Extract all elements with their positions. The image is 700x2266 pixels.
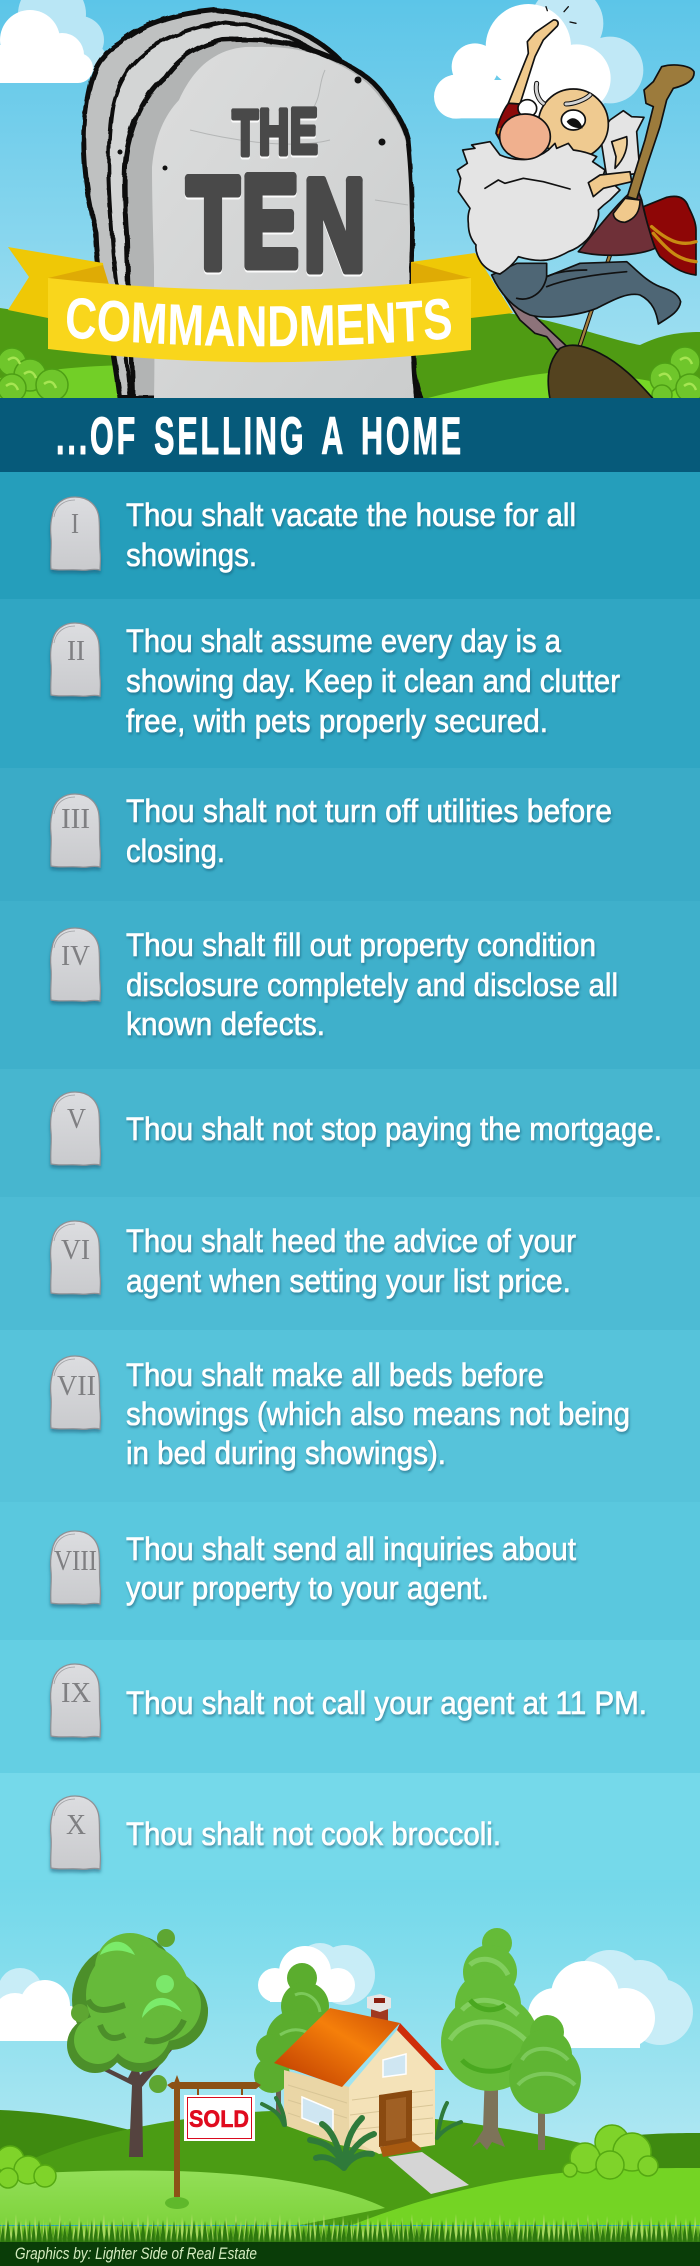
icon: tombstone IX: IX	[61, 1678, 91, 1709]
icon: tombstone VIII	[51, 1531, 100, 1604]
text: your property to your agent.	[126, 1570, 489, 1606]
tree: left with branches	[67, 1929, 208, 2157]
heading bar: of selling a home	[0, 398, 700, 472]
icon: tombstone X: X	[66, 1810, 86, 1841]
bush: left	[0, 2146, 56, 2188]
icon: tombstone II: II	[67, 636, 85, 667]
text: Thou shalt make all beds before	[126, 1357, 544, 1393]
nose	[500, 114, 550, 159]
icon: tombstone VIII: VIII	[54, 1546, 97, 1577]
text: in bed during showings).	[126, 1435, 446, 1471]
commandment 5	[0, 1069, 700, 1197]
icon: tombstone VII	[51, 1356, 100, 1429]
grass strip	[0, 2214, 700, 2242]
tree: behind house	[254, 1963, 329, 2115]
ear	[612, 137, 627, 168]
hills	[0, 2110, 700, 2225]
text: known defects.	[126, 1006, 325, 1042]
text: showing day. Keep it clean and clutter	[126, 663, 620, 699]
icon: tombstone VII: VII	[57, 1371, 96, 1402]
text	[126, 1357, 630, 1471]
chimney	[367, 1994, 391, 2022]
clouds	[0, 1943, 693, 2048]
step	[380, 2141, 421, 2157]
left wall	[284, 2070, 379, 2153]
text: closing.	[126, 833, 225, 869]
icon: tombstone V: V	[67, 1104, 86, 1135]
text	[126, 497, 576, 573]
text	[126, 623, 620, 739]
panel: header scene	[0, 0, 700, 398]
hills: header background	[0, 308, 700, 400]
raised arm	[508, 20, 558, 104]
sleeve	[496, 103, 520, 143]
commandment 10	[0, 1773, 700, 1880]
sold sign	[165, 2075, 261, 2209]
tablet title: TEN: TEN	[187, 149, 366, 298]
cape	[578, 187, 696, 275]
tablet: front stone	[118, 39, 417, 398]
footer credit bar	[0, 2242, 700, 2266]
house	[274, 1994, 444, 2157]
plants	[262, 2098, 461, 2168]
text: Thou shalt heed the advice of your	[126, 1223, 576, 1259]
icon: tombstone III: III	[61, 804, 90, 835]
banner text: COMMANDMENTS	[67, 298, 451, 346]
tablet title: THE: THE	[232, 96, 318, 169]
legs	[505, 297, 570, 349]
door	[379, 2090, 412, 2147]
commandment 2	[0, 599, 700, 768]
staff shaft	[575, 220, 622, 360]
text	[126, 1223, 576, 1299]
small arm	[588, 172, 632, 197]
cloud: top left	[0, 0, 106, 83]
text: Thou shalt vacate the house for all	[126, 497, 576, 533]
side hair	[600, 111, 644, 177]
gown	[492, 262, 681, 324]
icon: tombstone VI: VI	[61, 1235, 90, 1266]
icon: tombstone I: I	[71, 509, 79, 540]
text: Thou shalt send all inquiries about	[126, 1531, 576, 1567]
text	[126, 793, 612, 869]
commandment 7	[0, 1330, 700, 1502]
bush: left	[0, 348, 68, 402]
text: Thou shalt not cook broccoli.	[126, 1816, 501, 1852]
roof	[274, 2008, 400, 2087]
rock	[548, 345, 653, 399]
text: showings.	[126, 537, 257, 573]
icon: tombstone III	[51, 794, 100, 867]
icon: tombstone VI	[51, 1221, 100, 1294]
commandment 3	[0, 768, 700, 901]
impact marks	[546, 7, 576, 23]
text: disclosure completely and disclose all	[126, 967, 618, 1003]
cloud: behind Moses	[434, 0, 643, 119]
commandment 4	[0, 901, 700, 1069]
gripping hand	[613, 198, 640, 222]
staff upper and knob	[627, 65, 694, 199]
icon: tombstone V	[51, 1092, 100, 1165]
commandment 1	[0, 472, 700, 599]
icon: tombstone IV: IV	[61, 941, 90, 972]
icon: tombstone X	[51, 1796, 100, 1869]
text	[126, 927, 618, 1042]
text: Thou shalt fill out property condition	[126, 927, 596, 963]
text: Thou shalt not turn off utilities before	[126, 793, 612, 829]
text: agent when setting your list price.	[126, 1263, 571, 1299]
eyes and brows	[518, 83, 590, 130]
trees: right pair	[441, 1928, 581, 2150]
icon: tombstone II	[51, 623, 100, 696]
commandment 8	[0, 1502, 700, 1640]
bush: right	[563, 2125, 658, 2179]
windows	[302, 2097, 333, 2130]
icon: tombstone I	[51, 497, 100, 570]
text: Thou shalt assume every day is a	[126, 623, 561, 659]
commandment 9	[0, 1640, 700, 1773]
text: Thou shalt not stop paying the mortgage.	[126, 1111, 662, 1147]
icon: tombstone IV	[51, 928, 100, 1001]
credit text: Graphics by: Lighter Side of Real Estate	[15, 2244, 257, 2263]
commandment 6	[0, 1197, 700, 1330]
icon: tombstone IX	[51, 1664, 100, 1737]
sold text: SOLD	[189, 2106, 249, 2133]
head	[538, 89, 608, 159]
cartoon: Moses with staff	[434, 0, 696, 399]
beard	[457, 142, 620, 274]
walkway	[388, 2152, 469, 2194]
text: showings (which also means not being	[126, 1396, 630, 1432]
panel: footer scene with sold house	[0, 1880, 700, 2266]
text: free, with pets properly secured.	[126, 703, 548, 739]
text: Thou shalt not call your agent at 11 PM.	[126, 1685, 647, 1721]
text	[126, 1531, 576, 1606]
front wall	[349, 2030, 435, 2154]
tablet: back stone	[84, 10, 420, 398]
bush: right	[650, 347, 700, 405]
ribbon banner	[8, 247, 513, 362]
